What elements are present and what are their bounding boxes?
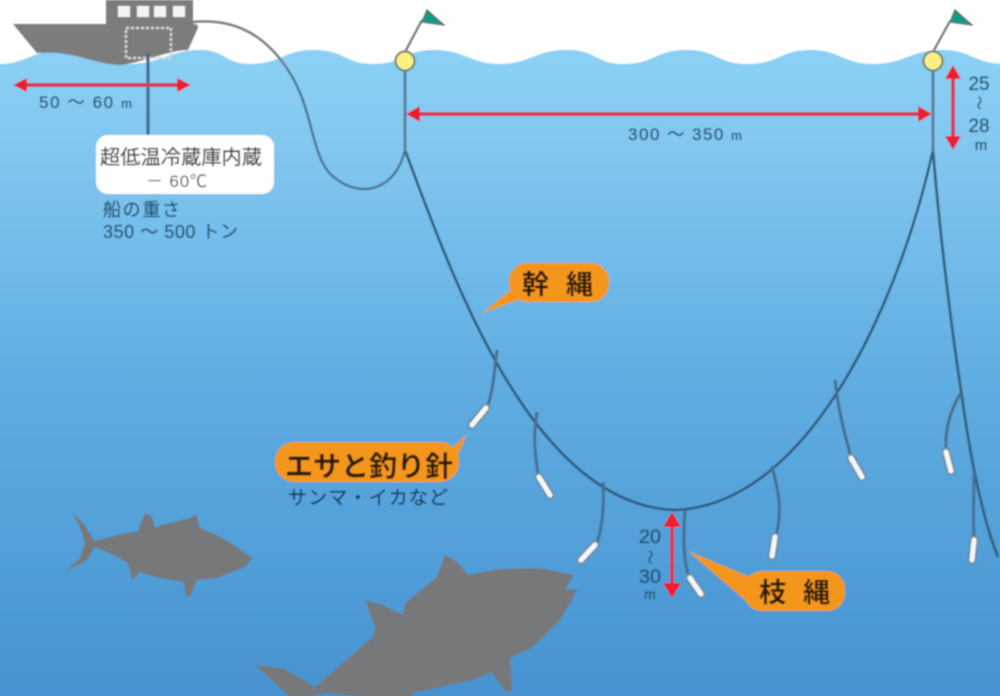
flag pole — [933, 21, 950, 52]
bait and hook callout — [275, 434, 467, 482]
callout text: 縄 — [803, 578, 830, 608]
main line from ship to buoy — [193, 21, 405, 189]
branch line callout — [688, 551, 845, 611]
ship windows — [118, 6, 185, 17]
buoy rope — [404, 70, 406, 152]
callout text: エサと釣り針 — [285, 451, 453, 482]
pointer — [688, 551, 750, 600]
flag — [950, 10, 972, 25]
right buoy with flag — [924, 10, 972, 152]
ship — [13, 0, 198, 65]
buoy rope depth label — [968, 74, 990, 154]
buoy float — [396, 52, 414, 70]
flag pole — [405, 20, 422, 52]
main line right of second buoy — [933, 150, 998, 557]
callout text — [759, 578, 830, 608]
span arrow between buoys — [406, 106, 932, 122]
buoy rope depth label: ～ — [971, 96, 987, 110]
pill — [275, 442, 459, 482]
branch length label: 20 — [639, 527, 661, 548]
storage note text: 超低温冷蔵庫内蔵 — [100, 146, 262, 169]
buoy rope depth label: 25 — [968, 74, 990, 95]
pill — [744, 571, 845, 611]
callout text — [522, 270, 593, 300]
buoy rope depth arrow — [945, 65, 961, 150]
main line sag between buoys — [405, 150, 933, 510]
ship weight label — [103, 200, 238, 242]
ship freezer compartment — [126, 28, 171, 58]
branch length label: m — [644, 586, 656, 602]
left buoy with flag — [396, 10, 444, 152]
pill — [509, 263, 609, 302]
callout text: 幹 — [522, 270, 549, 300]
tuna large — [255, 555, 578, 696]
buoy rope — [932, 70, 934, 152]
storage note box — [96, 135, 274, 194]
ship weight label: 350 ～ 500 トン — [103, 222, 238, 242]
ship length label: 50 ～ 60 m — [39, 93, 132, 112]
pointer — [482, 288, 518, 313]
bait examples: サンマ・イカなど — [288, 487, 448, 509]
pointer — [450, 434, 467, 462]
ship hull and cabin — [13, 0, 198, 65]
branch length label — [639, 527, 661, 602]
callout text: 縄 — [566, 270, 593, 300]
callout text: 枝 — [759, 578, 786, 608]
bait pieces — [472, 408, 974, 594]
main line callout — [482, 263, 609, 313]
span label: 300 ～ 350 m — [628, 125, 742, 144]
branch lines with bait — [488, 350, 974, 577]
leader from ship to storage note — [146, 53, 150, 135]
branch length label: ～ — [642, 550, 658, 564]
branch length arrow — [663, 512, 681, 598]
branch length label: 30 — [639, 567, 661, 588]
buoy rope depth label: m — [975, 137, 987, 154]
ship weight label: 船の重さ — [103, 200, 180, 220]
ship length arrow — [13, 78, 191, 92]
buoy rope depth label: 28 — [968, 116, 990, 137]
buoy float — [924, 52, 942, 70]
tuna small — [65, 512, 252, 597]
storage note box: － 60℃ — [146, 172, 207, 191]
flag — [422, 10, 444, 25]
